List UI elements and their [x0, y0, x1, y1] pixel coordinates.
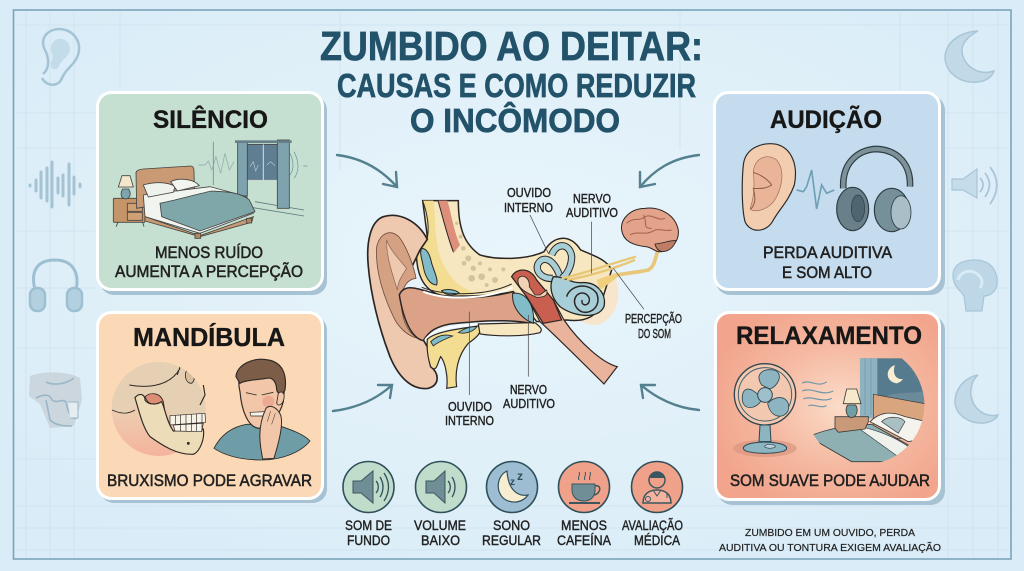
warning note [719, 527, 941, 554]
halo behind inner ear [568, 262, 618, 325]
bone upper [416, 201, 612, 322]
semicircular canals [537, 259, 560, 278]
label: nervo auditivo bottom: AUDITIVO [503, 397, 555, 411]
title: ZUMBIDO AO DEITAR: [320, 23, 703, 69]
label: ouvido interno bottom: INTERNO [445, 414, 494, 428]
auditory nerve [562, 257, 636, 280]
label: percepção do som: PERCEPÇÃO [625, 312, 682, 326]
label: ouvido interno top [504, 186, 553, 215]
title [320, 23, 703, 139]
illustration: fan and bedroom [733, 358, 930, 462]
tip: sono regular: z [517, 469, 523, 483]
tip: volume baixo: VOLUME [414, 518, 466, 533]
label: ouvido interno bottom: OUVIDO [448, 400, 492, 414]
side icon: head profile [953, 260, 997, 311]
label: nervo auditivo top [566, 192, 618, 220]
tip: sono regular [482, 462, 541, 548]
heading: audição: AUDIÇÃO [770, 104, 882, 134]
heading: relaxamento: RELAXAMENTO [736, 322, 922, 350]
warning note: ZUMBIDO EM UM OUVIDO, PERDA [745, 527, 915, 539]
panel: silêncio: AUMENTA A PERCEPÇÃO [115, 262, 303, 281]
title: CAUSAS E COMO REDUZIR [337, 67, 696, 104]
caption: relaxamento: SOM SUAVE PODE AJUDAR [730, 471, 930, 490]
tip: sono regular: SONO [493, 518, 530, 533]
caption: audição: PERDA AUDITIVA [763, 243, 893, 262]
tip: volume baixo [414, 462, 466, 548]
heading: mandíbula: MANDÍBULA [133, 322, 285, 352]
label: ouvido interno top: OUVIDO [507, 186, 551, 200]
arrow: audição to ear [640, 155, 699, 187]
leader lines [469, 215, 644, 395]
label: ouvido interno top: INTERNO [504, 201, 553, 215]
heading: silêncio: SILÊNCIO [153, 104, 268, 134]
label: percepção do som [625, 312, 682, 341]
ear canal [399, 288, 532, 341]
illustration: ear and headphones [742, 144, 911, 232]
label: nervo auditivo bottom [503, 383, 555, 411]
eustachian tube and middle ear [512, 270, 617, 384]
title: O INCÔMODO [410, 101, 620, 139]
label: ouvido interno bottom [445, 400, 494, 428]
lower bone [427, 326, 480, 388]
label: nervo auditivo top: NERVO [573, 192, 611, 206]
label: nervo auditivo bottom: NERVO [510, 383, 547, 397]
caption: mandíbula: BRUXISMO PODE AGRAVAR [107, 471, 312, 490]
panel: mandíbula [98, 312, 327, 503]
label: nervo auditivo top: AUDITIVO [566, 206, 618, 220]
cochlea [551, 277, 604, 315]
brain [621, 208, 678, 252]
panel: audição: E SOM ALTO [782, 263, 872, 282]
side icon: ear [42, 29, 79, 85]
arrow: silêncio to ear [337, 155, 397, 187]
tip: volume baixo: BAIXO [421, 533, 460, 548]
pinna [368, 215, 437, 389]
tip: som de fundo: FUNDO [347, 533, 390, 548]
warning note: AUDITIVA OU TONTURA EXIGEM AVALIAÇÃO [719, 541, 941, 554]
arrow: relaxamento to ear [641, 385, 699, 410]
illustration: bedroom [113, 140, 307, 238]
brain stem and nerve [597, 247, 660, 280]
tip: avaliação médica: MÉDICA [634, 533, 680, 548]
tip: som de fundo: SOM DE [345, 518, 392, 533]
panel: audição [714, 92, 945, 295]
side icon: waveform [30, 162, 80, 207]
caption: silêncio: MENOS RUÍDO [155, 243, 263, 262]
side icon: moon top [945, 31, 994, 82]
panel: relaxamento [716, 312, 945, 505]
tip: som de fundo [343, 462, 394, 548]
side icon: moon bottom [955, 375, 998, 423]
side icon: speaker [952, 167, 997, 204]
tip: avaliação médica [622, 462, 683, 548]
illustration: skull and jaw [110, 358, 310, 460]
ear anatomy diagram [368, 186, 682, 428]
eardrum [513, 293, 533, 323]
side icon: headphones [30, 260, 82, 311]
tip: avaliação médica: AVALIAÇÃO [622, 518, 683, 533]
tip: sono regular: REGULAR [482, 533, 541, 548]
spongy bone [455, 222, 505, 287]
label: percepção do som: DO SOM [638, 327, 671, 341]
arrow: mandíbula to ear [333, 385, 392, 411]
tip: sono regular: z [510, 477, 515, 488]
side icon: jaw [29, 372, 82, 428]
tip: menos cafeína: CAFEÍNA [557, 533, 611, 548]
tip: menos cafeína [557, 462, 611, 548]
tip: menos cafeína: MENOS [561, 518, 607, 533]
panel: silêncio [98, 92, 327, 295]
